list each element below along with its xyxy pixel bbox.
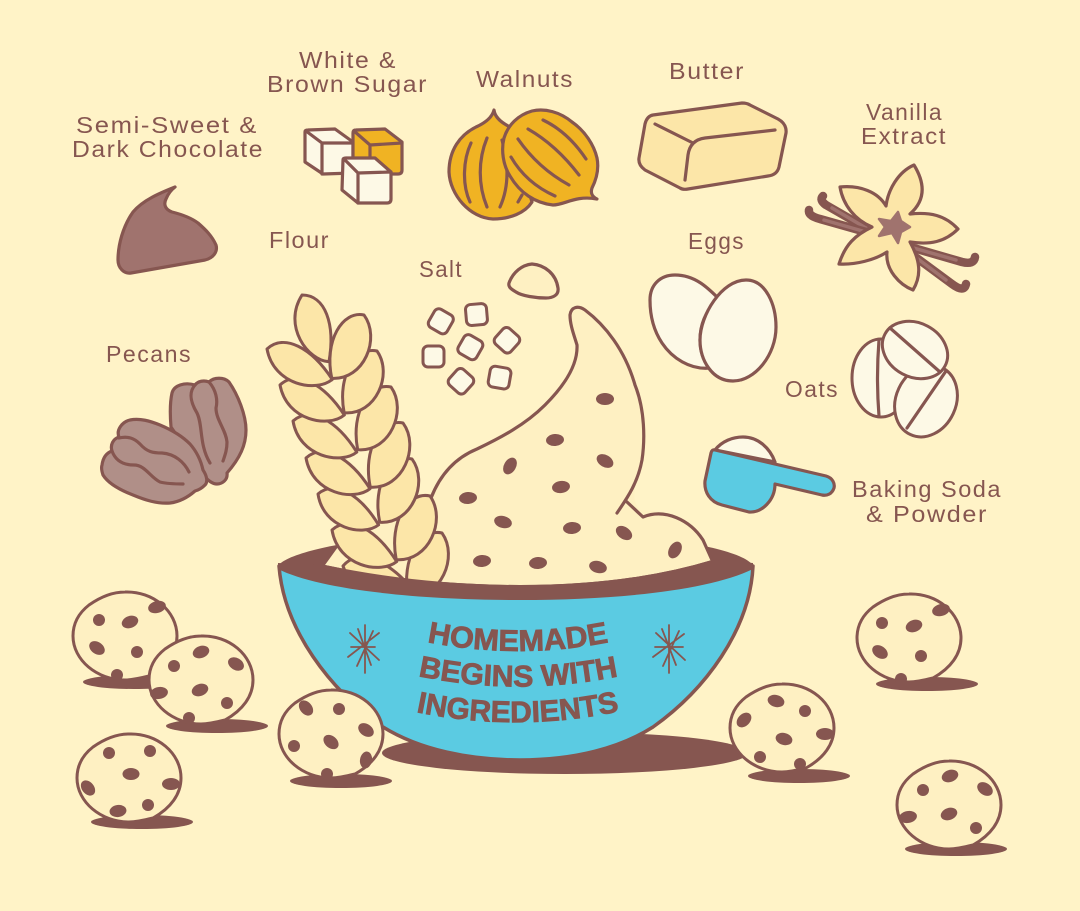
bowl <box>277 560 755 758</box>
icon: sugar cubes <box>305 129 402 203</box>
label: White & Brown Sugar: White & <box>299 47 397 73</box>
label: Salt: Salt <box>419 256 463 282</box>
icon: oats <box>852 310 969 447</box>
cookie dough ball B <box>149 636 268 733</box>
bowl title: Homemade Begins With Ingredients: BEGINS WITH <box>420 656 617 688</box>
icon: butter block <box>639 103 786 189</box>
cookie dough ball A <box>73 592 185 689</box>
label: Semi-Sweet & Dark Chocolate <box>72 112 264 162</box>
label: Butter: Butter <box>669 58 745 84</box>
cookie dough ball D <box>279 690 392 788</box>
icon: pecans <box>102 378 246 503</box>
bowl star left <box>348 625 379 673</box>
icon: eggs <box>650 275 776 381</box>
bowl shadow <box>382 732 748 774</box>
label: Baking Soda & Powder: & Powder <box>866 501 988 527</box>
label: Flour: Flour <box>269 227 330 253</box>
cookie dough ball C <box>77 734 193 829</box>
label: Baking Soda & Powder <box>852 476 1002 527</box>
icon: vanilla flower and pods <box>809 165 975 290</box>
bowl rim back <box>278 530 753 600</box>
icon: salt crystals <box>423 303 522 396</box>
label: Vanilla Extract <box>861 99 947 149</box>
label: Vanilla Extract: Extract <box>861 123 947 149</box>
cookie dough ball E <box>730 684 850 783</box>
label: Semi-Sweet & Dark Chocolate: Dark Chocolate <box>72 136 264 162</box>
bowl star right <box>653 625 685 673</box>
chocolate chips in dough <box>459 393 685 575</box>
icon: wheat stalk <box>259 289 461 606</box>
label: White & Brown Sugar: Brown Sugar <box>267 71 428 97</box>
icon: measuring scoop <box>705 437 834 512</box>
icon: small dough blob <box>509 264 558 298</box>
bowl title: Homemade Begins With Ingredients: HOMEMADE <box>428 622 608 652</box>
bowl title: Homemade Begins With Ingredients <box>418 622 618 723</box>
label: Eggs: Eggs <box>688 228 745 254</box>
cookie dough <box>325 307 712 585</box>
label: White & Brown Sugar <box>267 47 428 97</box>
cookie dough ball G <box>897 761 1007 856</box>
cookie dough ball F <box>857 594 978 691</box>
label: Vanilla Extract: Vanilla <box>866 99 943 125</box>
icon: chocolate chip <box>118 187 216 273</box>
label: Baking Soda & Powder: Baking Soda <box>852 476 1002 502</box>
label: Walnuts: Walnuts <box>476 66 574 92</box>
icon: walnuts <box>449 110 598 219</box>
bowl title: Homemade Begins With Ingredients: INGREDIENTS <box>418 692 618 723</box>
label: Pecans: Pecans <box>106 341 192 367</box>
label: Oats: Oats <box>785 376 839 402</box>
label: Semi-Sweet & Dark Chocolate: Semi-Sweet & <box>76 112 258 138</box>
